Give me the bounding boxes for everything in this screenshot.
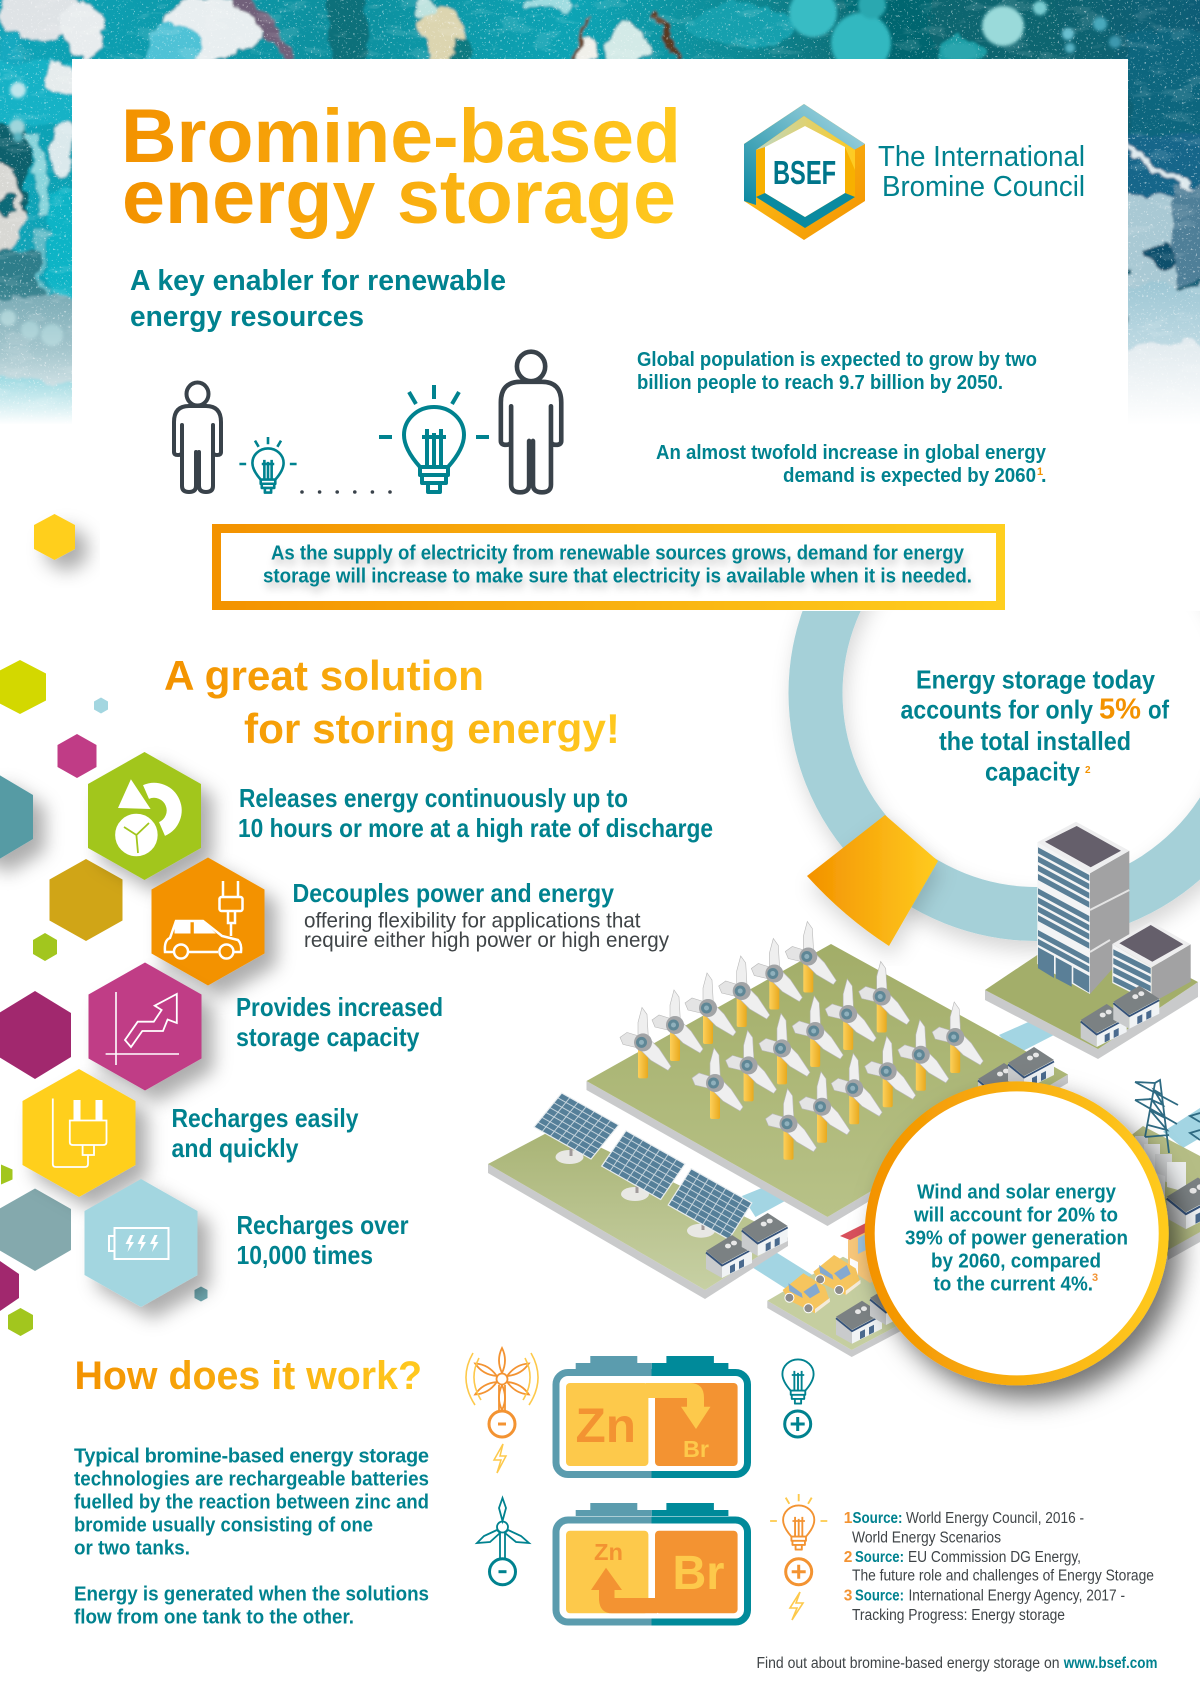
benefit: recharges over 10,000 times	[236, 1210, 408, 1270]
text: how it works	[74, 1446, 429, 1628]
icon: large light bulb	[379, 385, 489, 492]
text: energy storage today	[900, 664, 1169, 786]
logo text: The International Bromine Council	[878, 141, 1085, 203]
circle callout: wind and solar energy: to the current 4%.	[934, 1274, 1093, 1296]
callout: supply of electricity: storage will increase to make sure that electricity is available when it is needed.	[263, 566, 972, 588]
benefit: decouples power and energy	[292, 878, 669, 952]
text: how it works: flow from one tank to the other.	[74, 1606, 354, 1628]
callout: supply of electricity	[216, 528, 1000, 606]
platform: wind farm	[586, 944, 1068, 1226]
footer link: www.bsef.com	[1063, 1655, 1157, 1672]
footer link: Find out about bromine-based energy storage on	[756, 1655, 1060, 1672]
logo text: The International Bromine Council: Bromine Council	[882, 171, 1085, 203]
platform: solar park	[488, 1127, 788, 1299]
title: Bromine-based	[121, 94, 681, 179]
decorative hexagons	[0, 660, 208, 1336]
icon: wind turbine with negative terminal	[477, 1498, 529, 1585]
text: energy storage today: 2	[1085, 765, 1091, 776]
heading: a great solution: for storing energy!	[244, 705, 620, 752]
sources: Tracking Progress: Energy storage	[852, 1607, 1065, 1624]
logo: BSEF hexagon	[744, 104, 865, 240]
text: energy storage today: Energy storage today	[916, 664, 1155, 694]
smaller office block	[1112, 922, 1191, 1003]
benefit: releases energy	[238, 783, 713, 843]
solar panels	[534, 1093, 752, 1239]
icon: small light bulb	[239, 437, 297, 493]
text: energy storage today: the total installed	[939, 726, 1131, 756]
circle callout: wind and solar energy	[870, 1086, 1164, 1380]
benefit: decouples power and energy: offering flexibility for applications that	[304, 908, 641, 932]
sources: International Energy Agency, 2017 -	[908, 1588, 1125, 1604]
benefit: decouples power and energy: Decouples power and energy	[292, 878, 614, 908]
title	[121, 94, 681, 240]
circle callout: wind and solar energy: by 2060, compared	[931, 1250, 1101, 1272]
text: how it works: Energy is generated when the solutions	[74, 1584, 429, 1606]
text: energy storage today: capacity	[985, 756, 1080, 786]
pylon	[1135, 1080, 1200, 1153]
white content panel	[72, 59, 1128, 459]
icon hexagon: light blue battery	[84, 1179, 198, 1307]
sources: Source:	[855, 1588, 904, 1604]
house	[840, 1222, 880, 1283]
battery: charging: Zn	[576, 1400, 636, 1453]
logo: BSEF hexagon: BSEF	[773, 154, 836, 191]
benefit: releases energy: 10 hours or more at a high rate of discharge	[238, 813, 713, 843]
text: global population: Global population is expected to grow by two	[637, 349, 1037, 371]
text: how it works: or two tanks.	[74, 1538, 190, 1560]
text: energy demand	[656, 442, 1047, 487]
decorative yellow hexagon	[34, 514, 75, 560]
benefit: recharges over 10,000 times: 10,000 times	[236, 1240, 373, 1270]
battery: charging	[556, 1356, 748, 1474]
text: energy demand: An almost twofold increase in global energy	[656, 442, 1047, 464]
sources: World Energy Scenarios	[852, 1530, 1001, 1546]
subheading: A key enabler for renewable	[130, 265, 506, 297]
text: energy storage today: 5%	[1099, 694, 1141, 726]
illustration: isometric renewable energy landscape	[488, 822, 1200, 1357]
marble background banner	[0, 0, 1200, 524]
low building: substation	[1167, 1178, 1200, 1229]
platform: residential area	[767, 1257, 935, 1357]
text: energy storage today: of	[1148, 694, 1169, 724]
logo text: The International Bromine Council: The International	[878, 141, 1085, 173]
heading: a great solution: A great solution	[164, 652, 484, 699]
benefit: recharges easily: and quickly	[172, 1133, 299, 1163]
circle callout: wind and solar energy: 39% of power generation	[905, 1228, 1128, 1250]
icon hexagon: orange car and plug	[152, 858, 264, 986]
sources: 2	[844, 1549, 852, 1566]
benefit: increased storage capacity	[236, 992, 443, 1052]
text: how it works: bromide usually consisting of one	[74, 1514, 373, 1536]
power connector strips	[742, 1019, 1054, 1293]
sources: The future role and challenges of Energy Storage	[852, 1568, 1154, 1584]
sources: EU Commission DG Energy,	[908, 1549, 1081, 1566]
icon hexagon: magenta capacity chart	[88, 962, 202, 1090]
text: energy demand: .	[1041, 465, 1047, 487]
battery: discharging: Zn	[594, 1539, 623, 1565]
orange ring segment	[807, 815, 938, 946]
battery: discharging: Br	[672, 1547, 724, 1600]
text: global population	[637, 349, 1037, 394]
sources: Source:	[852, 1510, 902, 1527]
text: how it works: fuelled by the reaction between zinc and	[74, 1492, 429, 1514]
icon: lit bulb with positive terminal	[770, 1494, 827, 1620]
sources: World Energy Council, 2016 -	[906, 1510, 1084, 1527]
heading: how does it work: How does it work?	[74, 1354, 422, 1398]
battery: discharging	[556, 1503, 748, 1622]
platform: city district	[985, 923, 1198, 1059]
icon hexagon: green continuous energy	[88, 752, 201, 880]
circle callout: wind and solar energy: 3	[1092, 1272, 1098, 1284]
benefit: recharges easily: Recharges easily	[172, 1103, 359, 1133]
benefit: recharges over 10,000 times: Recharges over	[236, 1210, 408, 1240]
substation cabinets	[1135, 1136, 1186, 1198]
text: energy demand: 1	[1037, 466, 1043, 478]
low buildings: solar park and wind farm	[706, 1047, 1054, 1278]
text: global population: billion people to reach 9.7 billion by 2050.	[637, 372, 1003, 394]
wind turbines	[620, 922, 983, 1160]
icon: spinning fan with negative terminal	[466, 1348, 538, 1473]
subheading	[130, 265, 506, 333]
benefit: increased storage capacity: storage capacity	[236, 1022, 420, 1052]
battery: charging: Br	[683, 1436, 709, 1462]
platform: substation	[1100, 1108, 1200, 1260]
heading: a great solution	[164, 652, 620, 752]
low buildings: city district	[1081, 986, 1159, 1047]
circle callout: wind and solar energy: Wind and solar energy	[917, 1182, 1117, 1204]
icon: smaller person	[174, 382, 221, 492]
title: energy storage	[122, 155, 676, 240]
dotted growth line	[300, 490, 392, 494]
cars	[783, 1255, 861, 1313]
text: how it works: technologies are rechargeable batteries	[74, 1468, 429, 1490]
benefit: recharges easily	[172, 1103, 359, 1163]
benefit: decouples power and energy: require either high power or high energy	[304, 928, 669, 952]
sources: 1	[844, 1510, 853, 1527]
text: energy demand: demand is expected by 2060	[783, 465, 1036, 487]
callout: supply of electricity: As the supply of electricity from renewable sources grows, demand for energy	[271, 542, 965, 564]
sources	[844, 1510, 1154, 1624]
icon: light bulb with positive terminal	[782, 1359, 814, 1437]
icon: larger person	[501, 352, 561, 492]
benefit: increased storage capacity: Provides increased	[236, 992, 443, 1022]
icon hexagon: yellow plug	[22, 1069, 136, 1197]
low buildings: residential area	[836, 1282, 916, 1344]
subheading: energy resources	[130, 301, 364, 333]
circle callout: wind and solar energy: will account for 20% to	[913, 1204, 1118, 1226]
office tower	[1037, 822, 1129, 994]
text: energy storage today: accounts for only	[900, 694, 1093, 724]
benefit: releases energy: Releases energy continuously up to	[239, 783, 628, 813]
text: how it works: Typical bromine-based energy storage	[74, 1446, 429, 1468]
sources: Source:	[855, 1549, 904, 1566]
sources: 3	[844, 1588, 853, 1604]
ring: share of energy storage	[784, 611, 1200, 959]
